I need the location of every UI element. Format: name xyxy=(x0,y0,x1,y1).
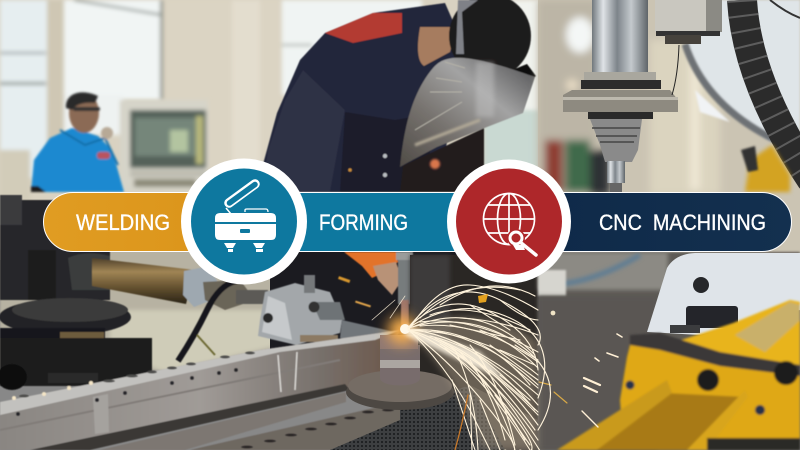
banner bar xyxy=(44,192,792,252)
stray sparks on floor xyxy=(539,311,622,427)
valve block xyxy=(236,275,395,345)
brass hydraulic cylinder xyxy=(92,258,195,304)
white machine housing xyxy=(647,253,800,335)
black hose xyxy=(178,281,236,361)
photo: workshop floor, white machine, yellow fixture xyxy=(538,252,800,450)
label: forming: FORMING xyxy=(319,210,408,235)
banner: welding segment xyxy=(44,192,190,252)
glove and torch xyxy=(338,252,413,328)
photo: factory background with worker in blue xyxy=(0,0,540,260)
icon: machine badge xyxy=(181,158,307,284)
lower tray xyxy=(30,384,540,450)
label: welding: WELDING xyxy=(76,210,170,235)
photo: CNC spindle and machine head xyxy=(538,0,800,256)
banner: forming segment xyxy=(290,192,465,252)
dark machine base xyxy=(0,195,152,390)
machine control screen xyxy=(120,100,208,192)
icon: globe with key badge xyxy=(447,160,571,284)
grey collar xyxy=(183,267,217,307)
steel rail xyxy=(0,330,400,450)
spindle body xyxy=(563,0,678,193)
machine head and hose xyxy=(655,0,800,192)
banner: cnc machining segment xyxy=(555,192,792,252)
photo: forming machine and steel rail xyxy=(0,195,540,450)
spark zone, workpiece and grating xyxy=(330,255,538,450)
worker in blue xyxy=(31,92,124,192)
yellow fixture xyxy=(557,300,800,450)
photo: welder with metal face shield xyxy=(262,0,536,192)
welding sparks xyxy=(372,285,550,450)
label: cnc machining: CNC MACHINING xyxy=(599,210,766,235)
